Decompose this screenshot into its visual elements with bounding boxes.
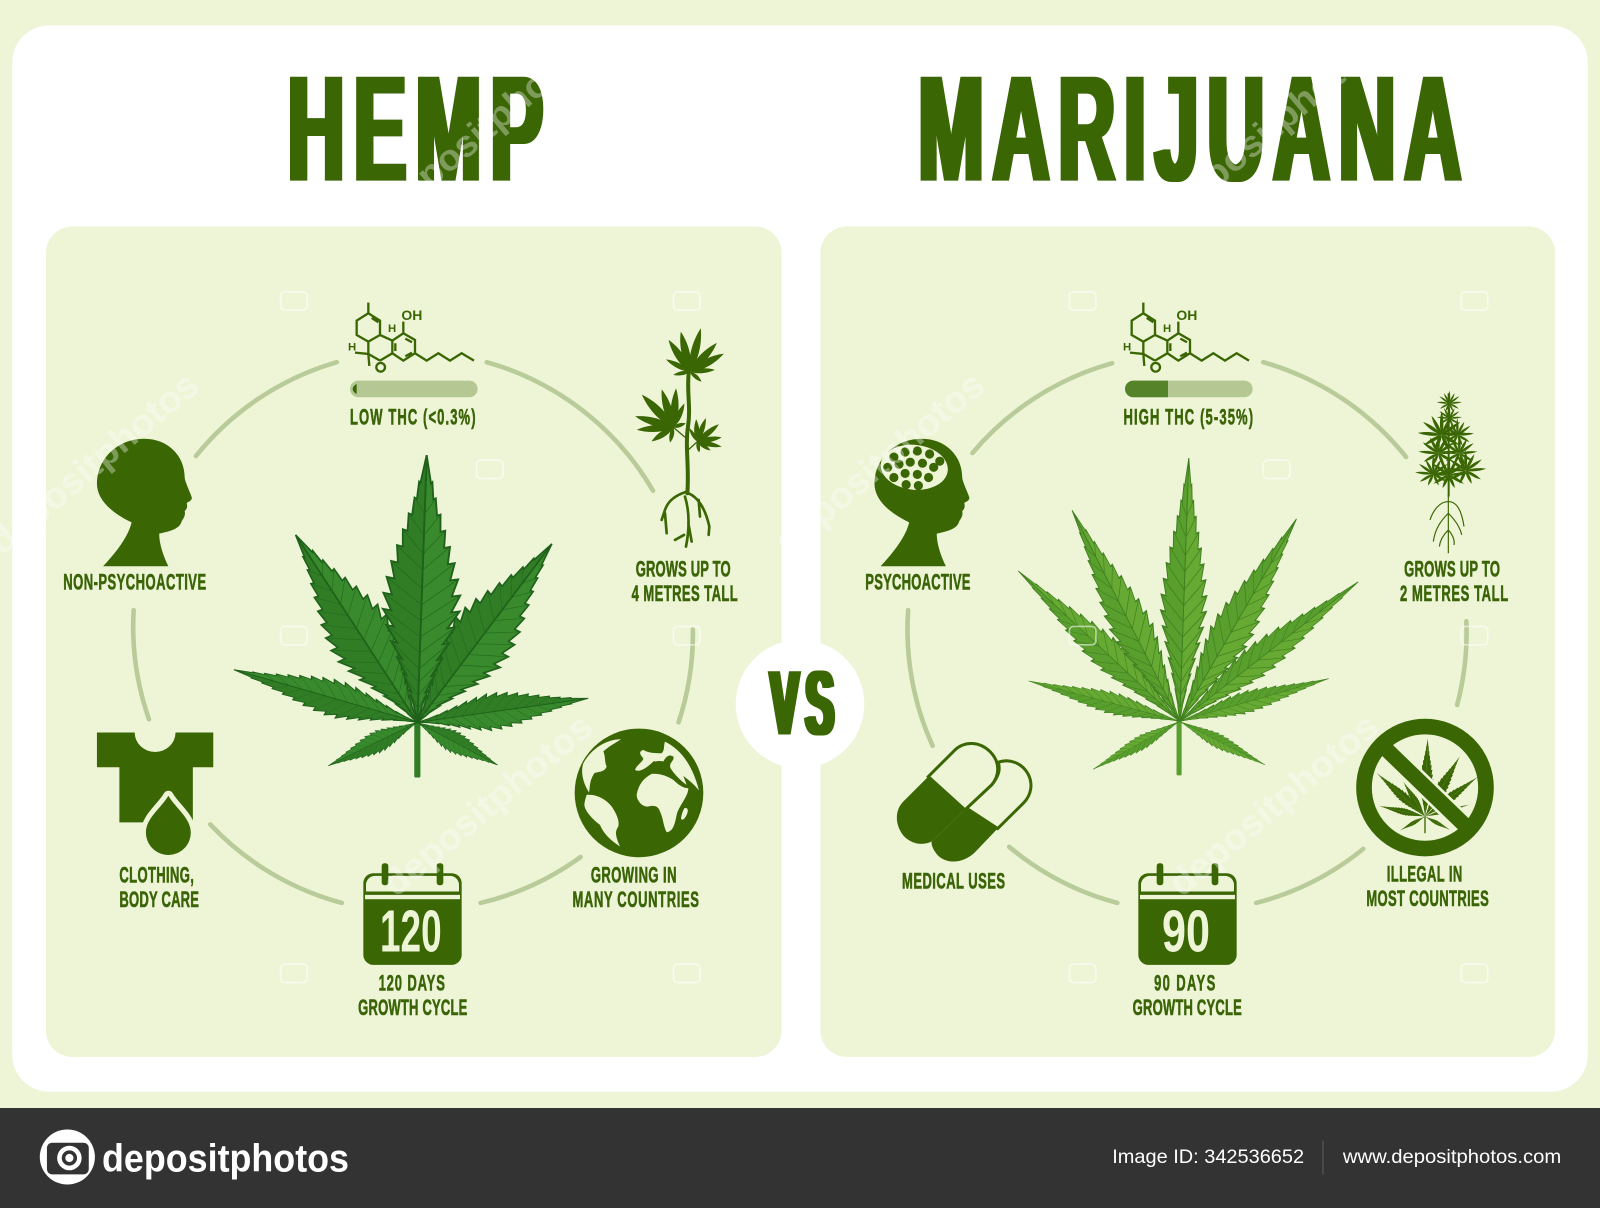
label: 90 days growth cycle (1133, 970, 1242, 1020)
label: grows 4 metres: GROWS UP TO (636, 556, 731, 581)
icon: calendar 120: 120 (380, 898, 442, 965)
watermark overlay: depositphotos (375, 26, 600, 224)
VS badge: VS (770, 652, 834, 755)
watermark overlay: depositphotos (767, 364, 992, 562)
VS badge (736, 640, 864, 768)
footer bar (0, 1108, 1600, 1208)
panel: marijuana (820, 226, 1555, 1057)
icon: THC molecule, marijuana (1123, 303, 1249, 372)
icon: globe (575, 729, 703, 857)
label: grows 2 metres: 2 METRES TALL (1400, 580, 1508, 606)
icon: calendar 90 (1138, 863, 1237, 965)
label: high THC: HIGH THC (5-35%) (1123, 404, 1253, 429)
watermark overlay: depositphotos (375, 705, 600, 904)
panel: hemp (46, 226, 782, 1057)
icon: head silhouette (97, 439, 192, 566)
label: grows 4 metres: 4 METRES TALL (632, 580, 738, 606)
icon: head with cannabis brain (874, 439, 969, 566)
label: grows 2 metres: GROWS UP TO (1404, 556, 1500, 581)
title: marijuana: MARIJUANA (918, 44, 1461, 213)
label: 120 days growth cycle: GROWTH CYCLE (358, 994, 467, 1020)
marijuana leaf (1007, 457, 1368, 776)
label: growing in many countries: GROWING IN (591, 862, 677, 887)
label: growing in many countries: MANY COUNTRIES (572, 886, 699, 912)
footer image id: Image ID: 342536652 (1112, 1146, 1304, 1168)
ring arcs: marijuana (907, 362, 1467, 903)
label: clothing, body care (119, 862, 199, 912)
icon: tall hemp plant (634, 327, 726, 547)
icon: t-shirt with drop (97, 733, 213, 855)
icon: THC molecule, hemp (348, 303, 474, 372)
title: hemp: HEMP (288, 44, 543, 213)
icon: short marijuana plant (1415, 391, 1486, 553)
icon: footer camera logo (40, 1129, 95, 1185)
icon: capsules (897, 743, 1031, 862)
label: illegal in most countries: MOST COUNTRIES (1366, 885, 1489, 911)
THC meter: low (350, 381, 478, 397)
label: 90 days growth cycle: GROWTH CYCLE (1133, 994, 1242, 1020)
label: 120 days growth cycle (358, 970, 467, 1020)
ring arcs: hemp (133, 362, 693, 903)
hemp leaf (229, 454, 591, 777)
label: grows 2 metres (1400, 556, 1508, 606)
watermark overlay: depositphotos (1160, 26, 1386, 224)
footer website: www.depositphotos.com (1342, 1146, 1561, 1168)
label: illegal in most countries (1366, 861, 1489, 911)
label: clothing, body care: BODY CARE (119, 886, 199, 912)
label: 120 days growth cycle: 120 DAYS (379, 970, 445, 996)
label: grows 4 metres (632, 556, 738, 606)
icon: calendar 120 (363, 863, 462, 965)
label: 90 days growth cycle: 90 DAYS (1154, 970, 1215, 996)
label: low THC: LOW THC (<0.3%) (350, 404, 476, 429)
label: non-psychoactive: NON-PSYCHOACTIVE (63, 569, 206, 595)
icon: prohibited leaf (1364, 727, 1486, 849)
footer divider (1322, 1141, 1323, 1174)
label: medical uses: MEDICAL USES (902, 868, 1005, 894)
watermark overlay (0, 26, 1488, 983)
THC meter: high (1125, 381, 1253, 397)
label: illegal in most countries: ILLEGAL IN (1387, 861, 1462, 886)
watermark overlay: depositphotos (1160, 705, 1386, 904)
label: clothing, body care: CLOTHING, (119, 862, 194, 887)
icon: calendar 90: 90 (1162, 898, 1210, 965)
label: psychoactive: PSYCHOACTIVE (865, 569, 970, 595)
footer brand name: depositphotos (102, 1137, 349, 1180)
label: growing in many countries (572, 862, 699, 912)
